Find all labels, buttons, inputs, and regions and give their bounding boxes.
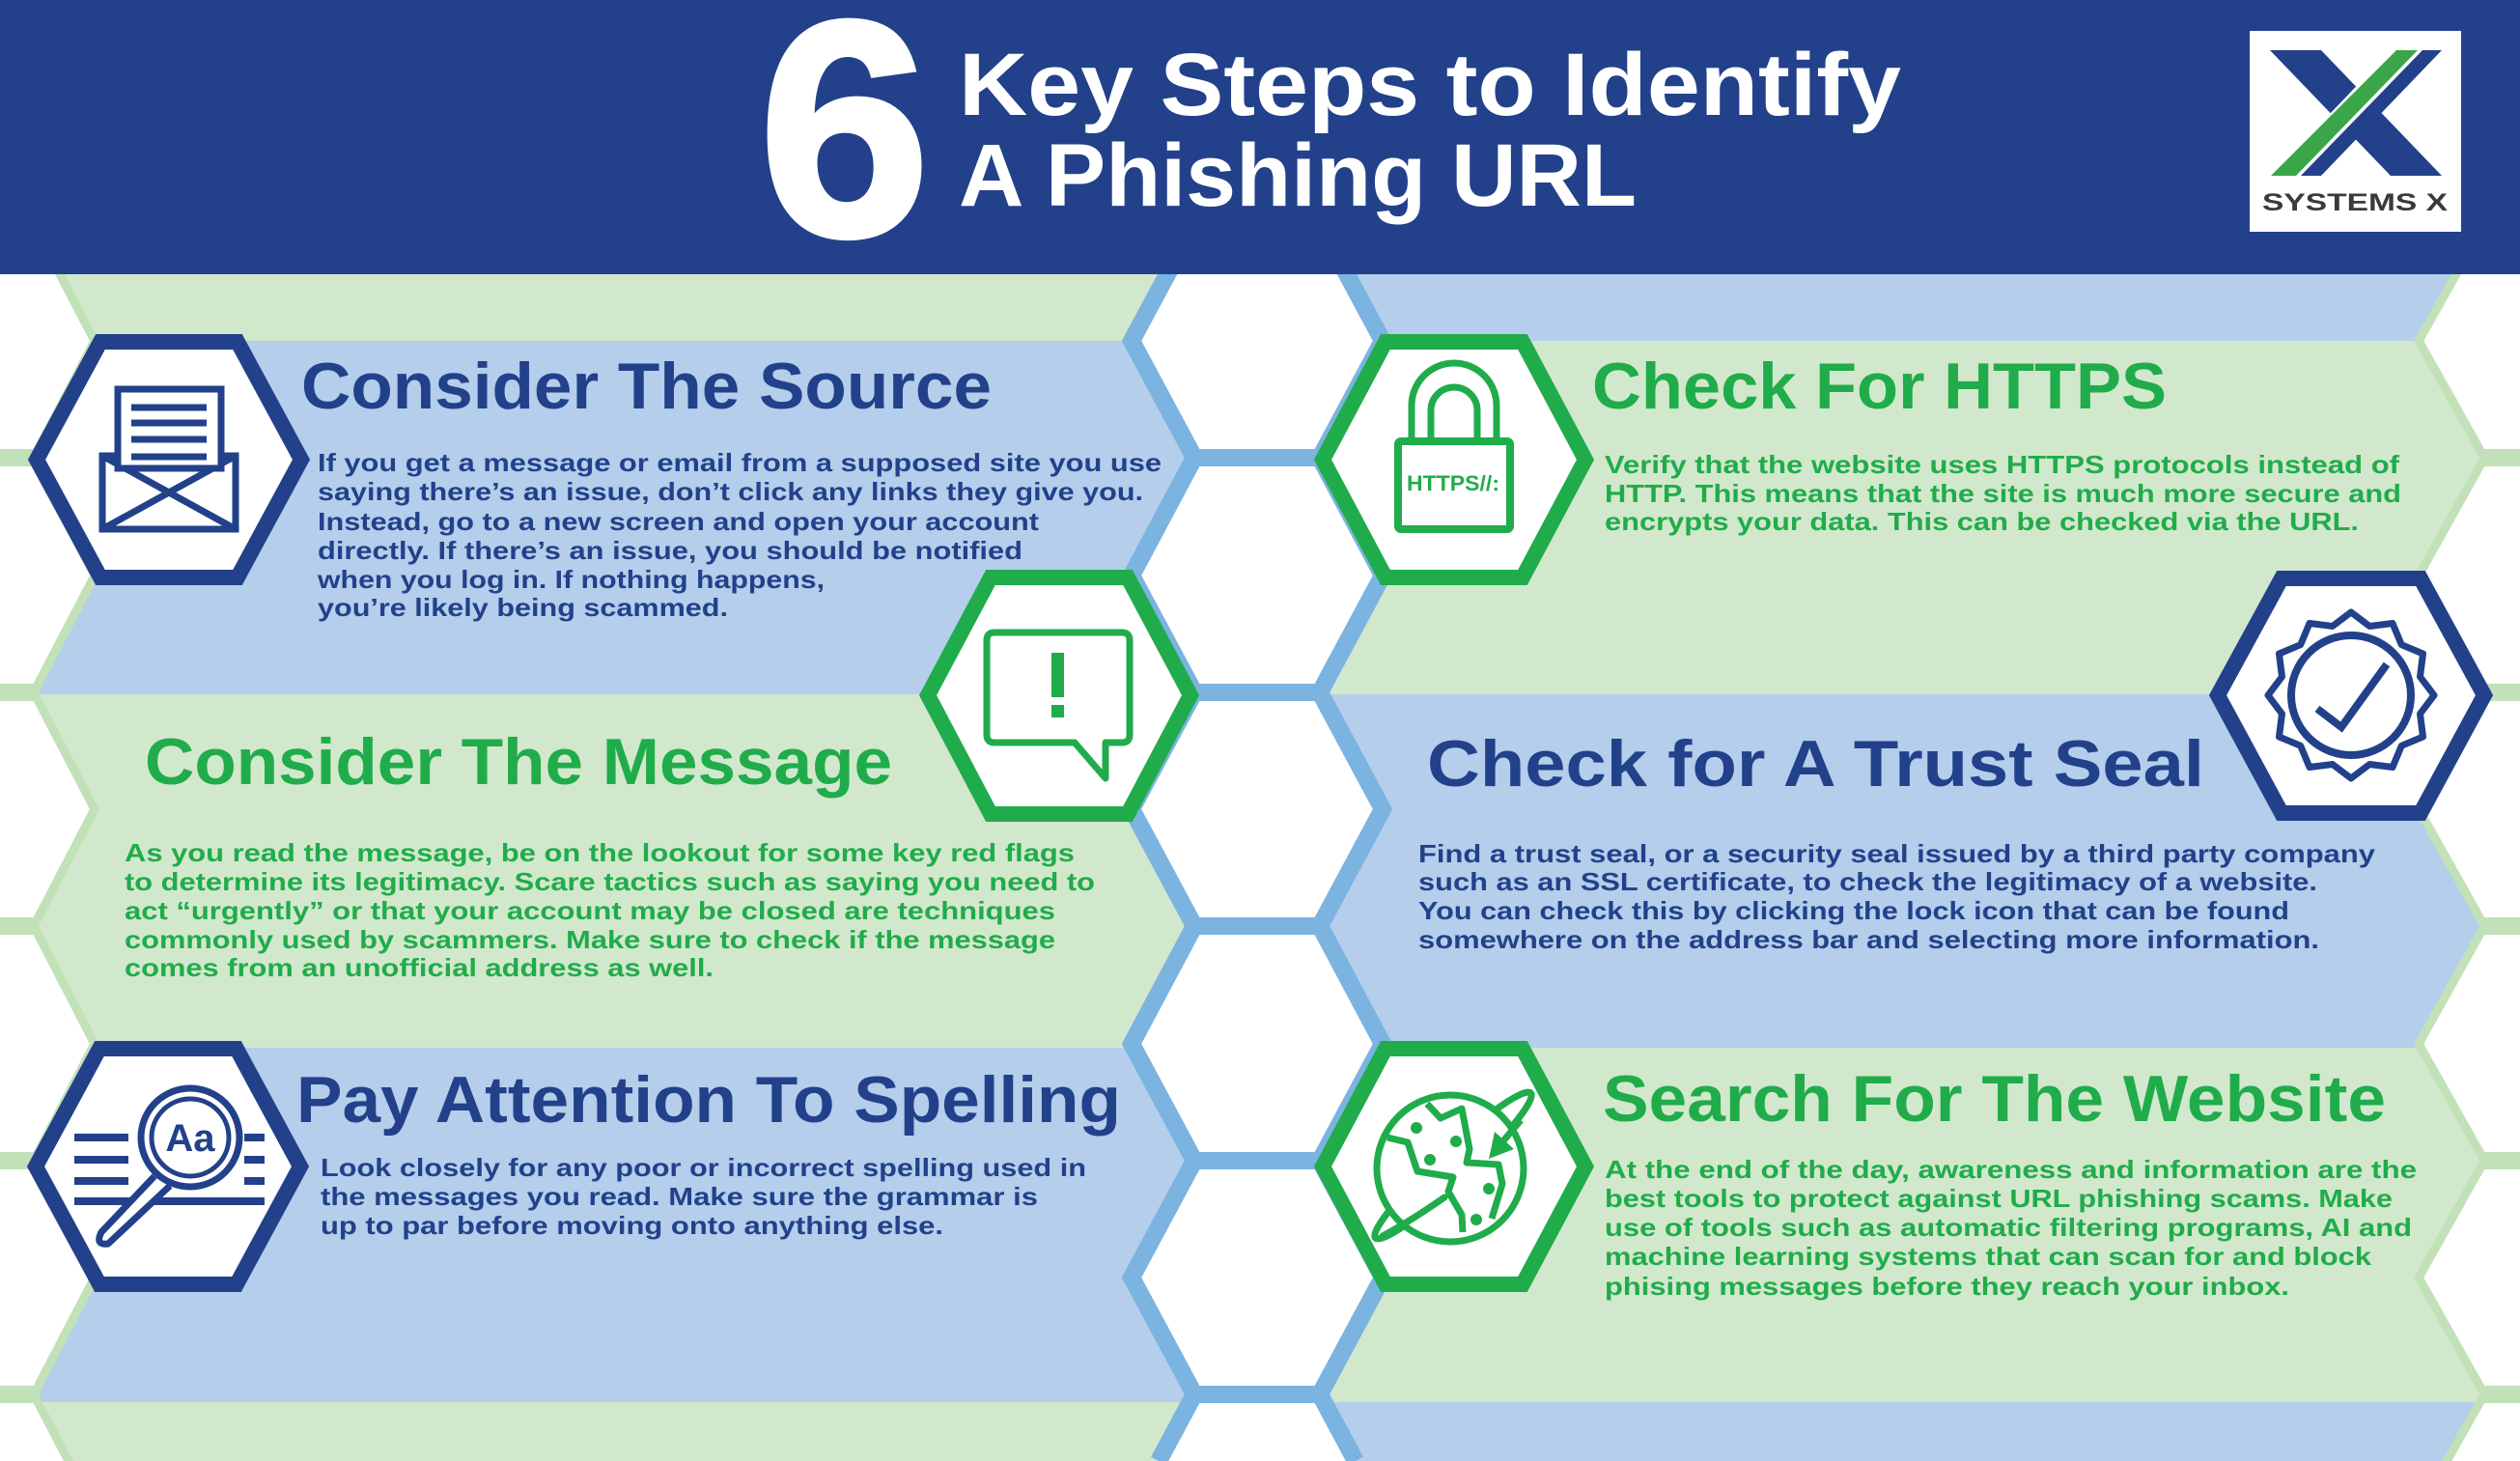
heading: Search For The Website: Search For The Website <box>1603 1062 2386 1136</box>
text: search body: use of tools such as automatic filtering programs, AI and <box>1605 1213 2412 1242</box>
text: search body: machine learning systems that can scan for and block <box>1605 1242 2372 1271</box>
text: https body: HTTP. This means that the site is much more secure and <box>1605 479 2401 508</box>
heading: Consider The Source: Consider The Source <box>301 350 992 423</box>
text: search body: best tools to protect against URL phishing scams. Make <box>1605 1184 2393 1213</box>
icon: trust seal hexagon <box>2218 578 2484 813</box>
logo: Systems X: SYSTEMS X <box>2262 189 2448 216</box>
icon: HTTPS lock hexagon <box>1323 342 1585 577</box>
text: https body: Verify that the website uses HTTPS protocols instead of <box>1605 450 2399 479</box>
icon: envelope hexagon <box>37 342 301 577</box>
heading: Consider The Message: Consider The Message <box>145 725 892 799</box>
text: source body: you’re likely being scammed. <box>318 593 728 622</box>
heading: Check For HTTPS: Check For HTTPS <box>1592 350 2167 423</box>
middle hex column <box>1132 224 1383 1461</box>
text: source body: directly. If there’s an issue, you should be notified <box>318 536 1022 565</box>
icon: HTTPS lock hexagon: HTTPS//: <box>1407 471 1499 495</box>
text: source body: Instead, go to a new screen and open your account <box>318 507 1039 536</box>
title: Key Steps to Identify <box>959 36 1901 134</box>
panel: left column bands <box>39 274 1185 1461</box>
header bar <box>0 0 2520 274</box>
icon: spelling magnifier hexagon: Aa <box>165 1117 215 1160</box>
text: search body <box>1605 1155 2417 1301</box>
title: A Phishing URL <box>959 126 1637 225</box>
text: source body: If you get a message or email from a supposed site you use <box>318 448 1162 477</box>
text: https body <box>1605 450 2401 536</box>
text: message body: As you read the message, be on the lookout for some key red flags <box>125 838 1075 867</box>
text: source body: when you log in. If nothing happens, <box>317 565 825 594</box>
text: trust seal body <box>1418 839 2376 954</box>
text: source body: saying there’s an issue, don’t click any links they give you. <box>318 477 1143 506</box>
text: trust seal body: somewhere on the address bar and selecting more information. <box>1418 925 2319 954</box>
text: message body <box>125 838 1095 982</box>
text: spelling body <box>321 1153 1086 1240</box>
icon: globe hexagon <box>1323 1049 1585 1284</box>
text: trust seal body: such as an SSL certificate, to check the legitimacy of a website. <box>1418 867 2317 896</box>
text: message body: comes from an unofficial address as well. <box>125 953 714 982</box>
logo: Systems X <box>2250 31 2461 232</box>
text: trust seal body: Find a trust seal, or a security seal issued by a third party company <box>1418 839 2376 868</box>
text: spelling body: the messages you read. Make sure the grammar is <box>321 1182 1038 1211</box>
heading: Check for A Trust Seal: Check for A Trust Seal <box>1427 727 2204 801</box>
text: message body: to determine its legitimacy. Scare tactics such as saying you need to <box>125 867 1095 896</box>
text: search body: phising messages before they reach your inbox. <box>1605 1272 2289 1301</box>
text: spelling body: Look closely for any poor or incorrect spelling used in <box>321 1153 1086 1182</box>
text: source body <box>317 448 1162 622</box>
panel: right column bands <box>1330 274 2479 1461</box>
text: trust seal body: You can check this by clicking the lock icon that can be found <box>1418 896 2289 925</box>
icon: spelling magnifier hexagon <box>36 1049 300 1284</box>
text: message body: commonly used by scammers. Make sure to check if the message <box>125 925 1055 954</box>
text: https body: encrypts your data. This can be checked via the URL. <box>1605 507 2359 536</box>
heading: Pay Attention To Spelling: Pay Attention To Spelling <box>296 1063 1121 1137</box>
text: search body: At the end of the day, awareness and information are the <box>1605 1155 2417 1184</box>
text: spelling body: up to par before moving onto anything else. <box>321 1211 943 1240</box>
icon: exclamation speech bubble hexagon <box>928 577 1190 814</box>
text: message body: act “urgently” or that your account may be closed are techniques <box>125 896 1055 925</box>
title <box>759 0 1901 300</box>
